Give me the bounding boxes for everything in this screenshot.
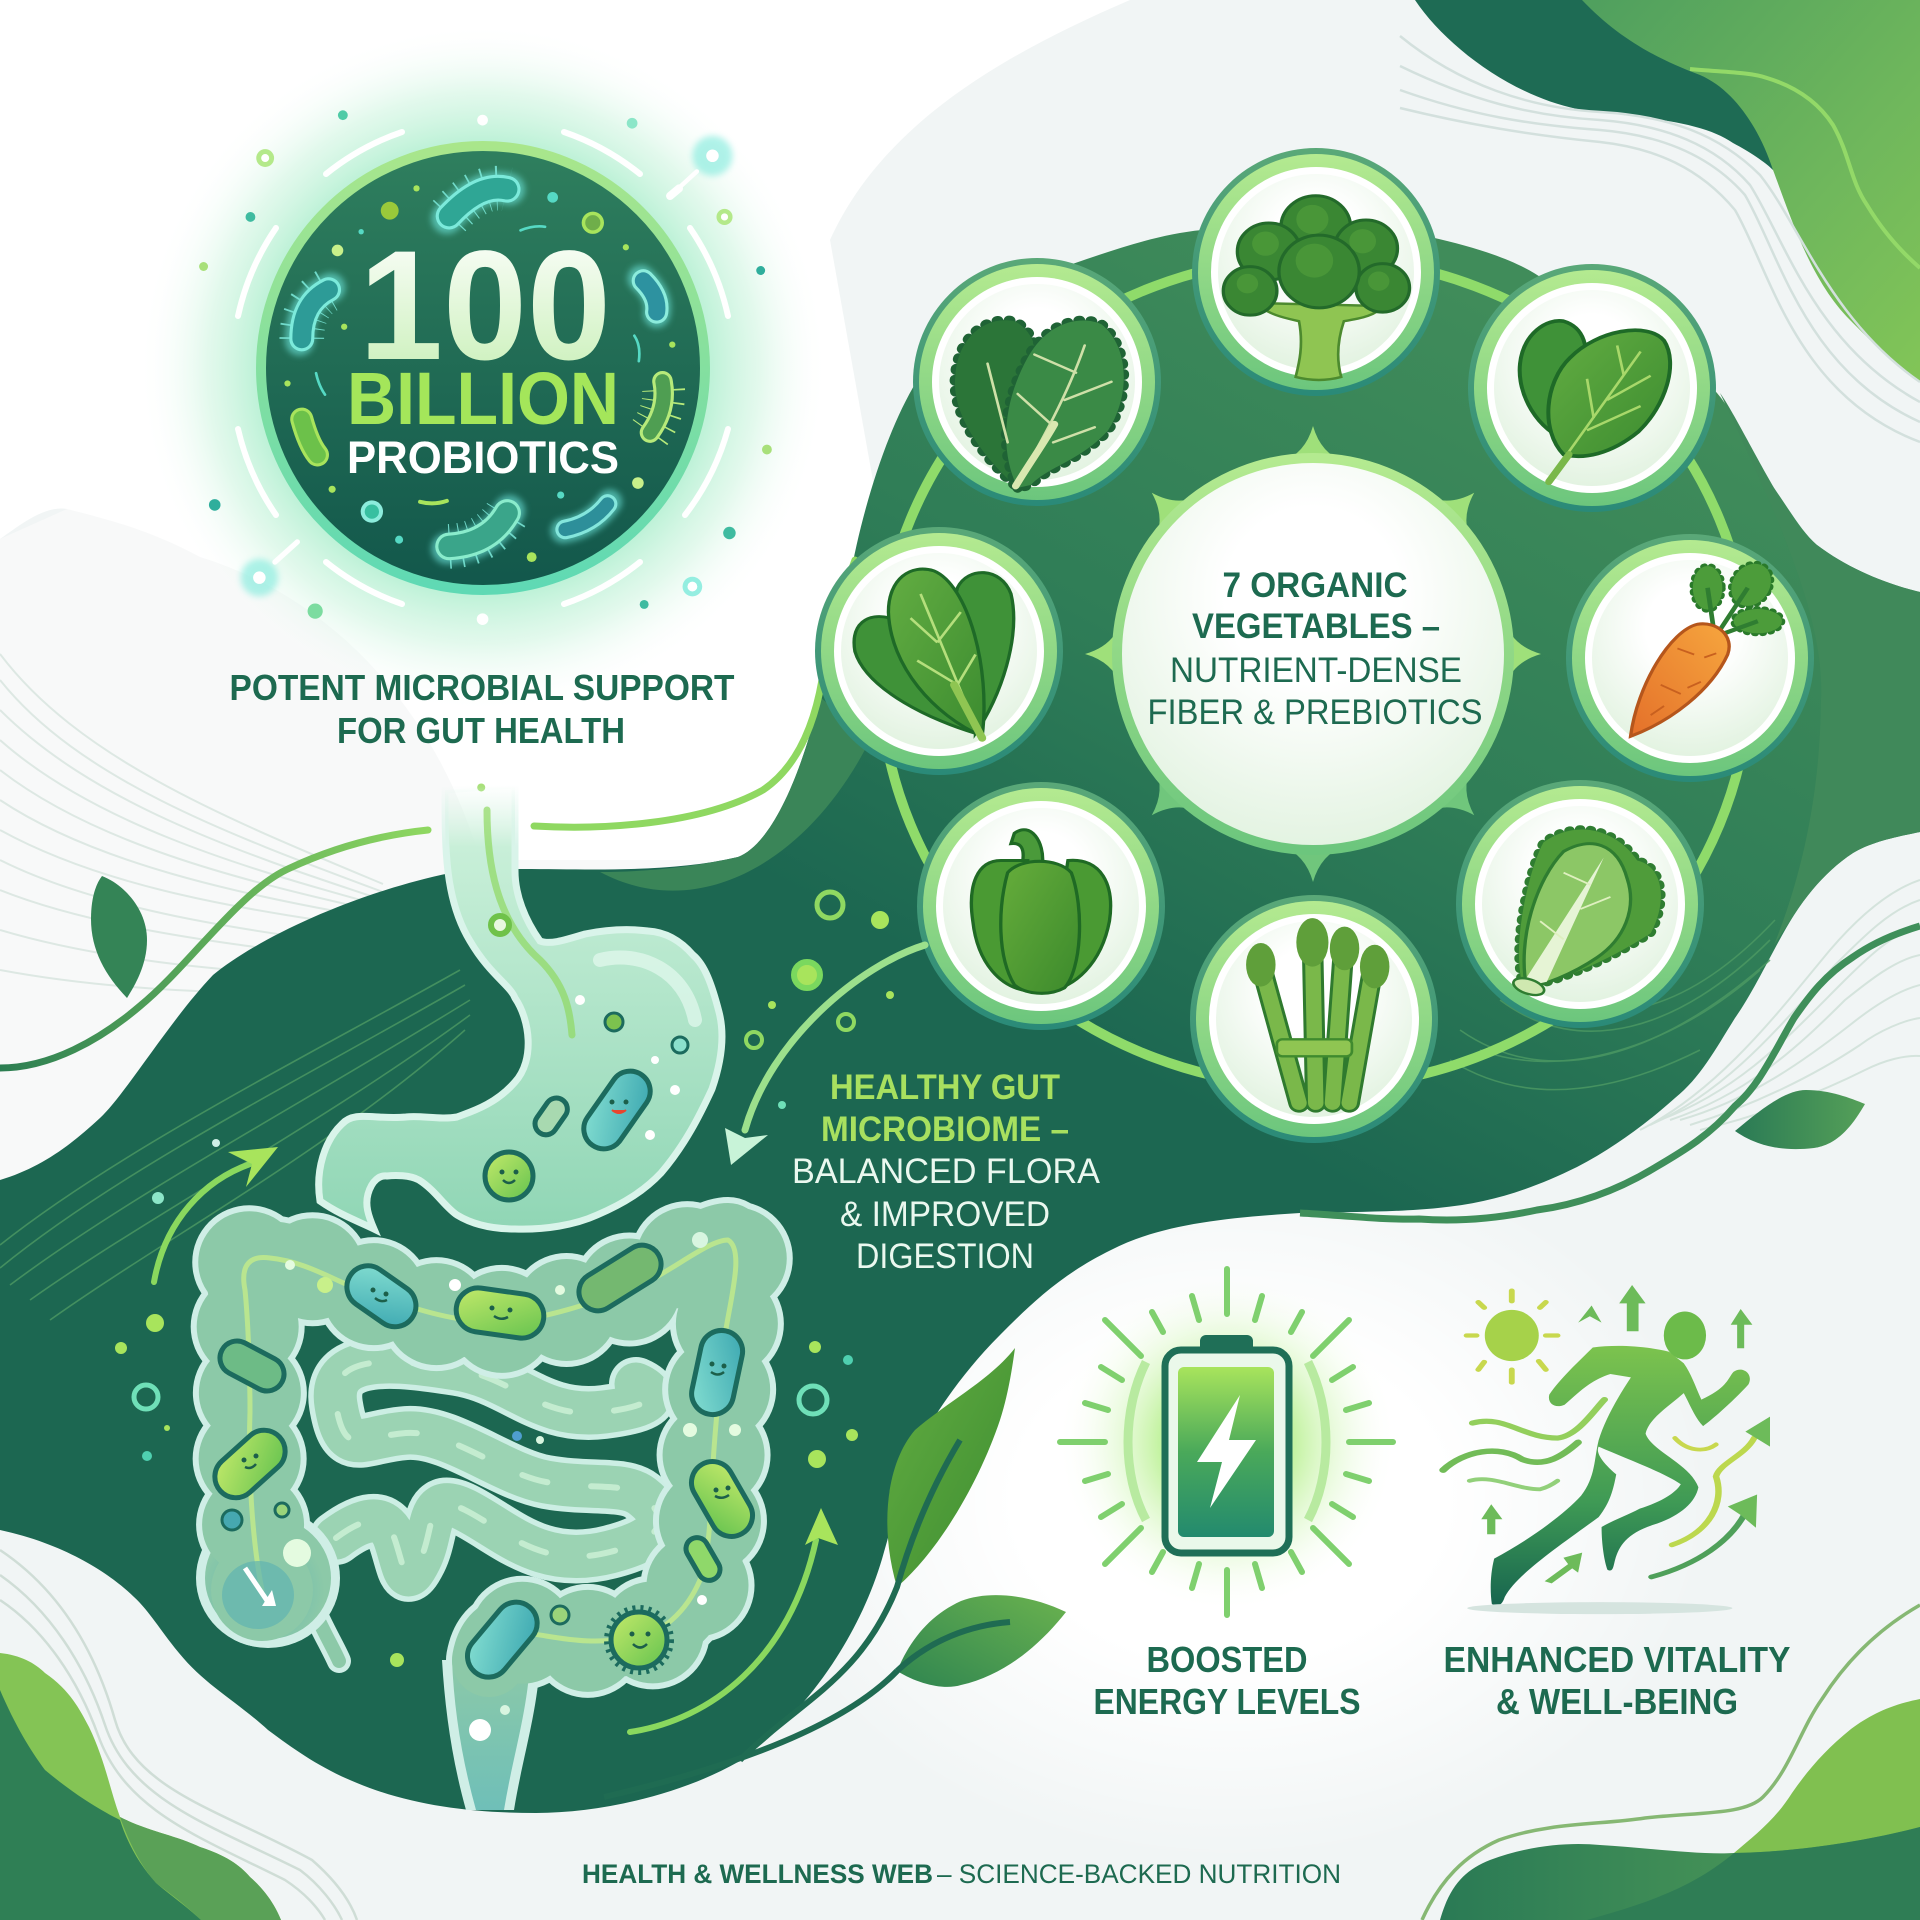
center text: VEGETABLES – <box>1192 607 1440 646</box>
icon: running figure <box>1443 1285 1770 1614</box>
outside particles <box>115 892 894 1667</box>
icon: battery energy <box>1057 1269 1397 1615</box>
badge word probiotics: PROBIOTICS <box>347 432 619 483</box>
center text: FIBER & PREBIOTICS <box>1148 693 1482 732</box>
icon: kale <box>955 320 1124 488</box>
icon: carrot <box>1631 558 1782 736</box>
heading: healthy gut microbiome: BALANCED FLORA <box>792 1152 1101 1191</box>
bottom-right corner waves <box>1422 1605 1920 1920</box>
panel: 100 billion probiotics badge <box>138 23 828 791</box>
colon, cecum and rectum <box>196 1240 736 1810</box>
ground shadow <box>1467 1602 1732 1614</box>
badge word billion: BILLION <box>347 357 619 440</box>
arrow: vegetables to gut <box>725 945 925 1165</box>
label: boosted energy levels: ENERGY LEVELS <box>1094 1681 1360 1722</box>
center text <box>1148 566 1482 732</box>
motion waves <box>1443 1400 1754 1577</box>
footer <box>582 1859 1341 1889</box>
heading: potent microbial support: POTENT MICROBIAL SUPPORT <box>230 667 735 708</box>
footer: HEALTH & WELLNESS WEB <box>582 1859 933 1889</box>
icon: spinach left <box>854 569 1014 738</box>
cecum details <box>245 1539 311 1606</box>
icon: broccoli <box>1223 196 1410 380</box>
icon: green pepper <box>971 830 1111 993</box>
heading: healthy gut microbiome <box>792 1068 1101 1276</box>
badge ring segments <box>238 132 728 604</box>
label: boosted energy levels: BOOSTED <box>1146 1639 1308 1680</box>
top-right wave <box>1400 0 1920 442</box>
badge glow <box>138 23 828 713</box>
badge microbes <box>284 185 675 562</box>
heading: healthy gut microbiome: HEALTHY GUT <box>830 1068 1060 1107</box>
gut microbes <box>206 1063 760 1686</box>
arrow: left upward <box>154 1147 278 1282</box>
panel: vegetable ring <box>815 148 1814 1143</box>
heading: potent microbial support: FOR GUT HEALTH <box>337 710 625 751</box>
icon: asparagus <box>1246 918 1389 1103</box>
arrow: right upward <box>630 1508 838 1732</box>
left and bottom background stripes <box>0 654 420 1920</box>
gut particles <box>222 995 741 1741</box>
motion arrows <box>1481 1285 1770 1583</box>
icon: lettuce <box>1511 829 1661 998</box>
floating particles <box>199 110 772 791</box>
curved line: blob edge highlight <box>534 560 855 827</box>
badge number: 100 <box>359 219 611 393</box>
center text: NUTRIENT-DENSE <box>1170 651 1462 690</box>
ring track <box>880 257 1750 1087</box>
center circle <box>1085 426 1541 882</box>
icon: spinach right <box>1520 321 1670 482</box>
right swoosh background stripes <box>1640 880 1920 1130</box>
badge disc <box>261 146 705 590</box>
curved line and left leaf <box>0 830 428 1068</box>
sun <box>1467 1291 1558 1382</box>
label: enhanced vitality: & WELL-BEING <box>1496 1681 1738 1722</box>
runner head <box>1664 1312 1706 1359</box>
runner body <box>1491 1346 1750 1606</box>
heading: healthy gut microbiome: MICROBIOME – <box>821 1110 1069 1149</box>
label: enhanced vitality: ENHANCED VITALITY <box>1444 1639 1790 1680</box>
heading: healthy gut microbiome: & IMPROVED <box>840 1195 1050 1234</box>
label: enhanced vitality <box>1444 1639 1790 1722</box>
big leaves at blob edge <box>604 1348 1066 1797</box>
panel: digestive system <box>115 785 925 1810</box>
vegetable plates <box>815 148 1814 1143</box>
label: boosted energy levels <box>1094 1639 1360 1722</box>
right swoosh line and leaf <box>1300 926 1920 1220</box>
stomach highlights <box>487 810 695 1035</box>
stomach <box>319 785 722 1229</box>
heading: healthy gut microbiome: DIGESTION <box>856 1237 1034 1276</box>
vegetable icons <box>854 196 1782 1103</box>
footer: – SCIENCE-BACKED NUTRITION <box>937 1859 1341 1889</box>
center text: 7 ORGANIC <box>1222 566 1408 605</box>
heading: potent microbial support <box>230 667 735 751</box>
bottom-left corner waves <box>0 1653 281 1920</box>
small intestine <box>335 1362 659 1575</box>
